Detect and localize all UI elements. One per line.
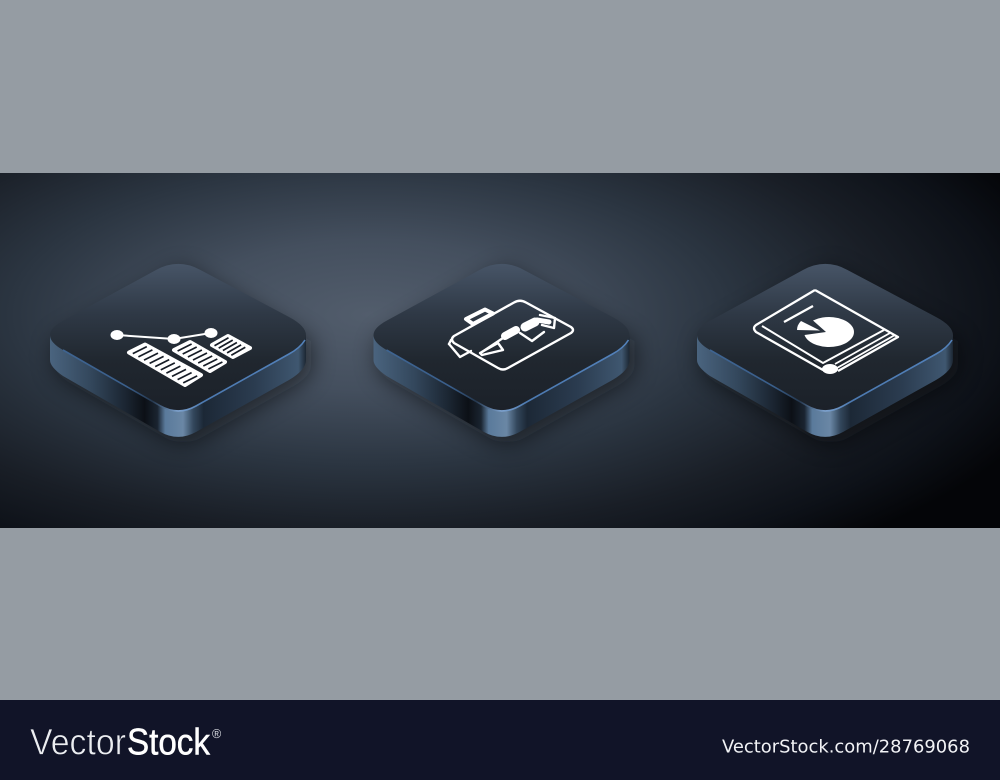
image id text: VectorStock.com/28769068 <box>722 738 970 758</box>
icon: book with pie chart <box>754 290 898 374</box>
tile 3: report book <box>697 264 958 443</box>
top grey band <box>0 0 1000 173</box>
tile 2: briefcase <box>374 264 634 443</box>
dark gradient panel <box>0 173 1000 528</box>
logo: VectorStock: Vector <box>30 722 126 762</box>
logo: VectorStock <box>30 722 222 762</box>
tile 1: coins and chart <box>50 264 311 443</box>
icon: coin stacks with line chart <box>110 328 250 385</box>
logo: VectorStock: ® <box>212 727 222 741</box>
logo: VectorStock: Stock <box>127 722 210 762</box>
bottom grey band <box>0 528 1000 700</box>
footer bar <box>0 700 1000 780</box>
icon: briefcase with banknotes <box>449 301 573 370</box>
